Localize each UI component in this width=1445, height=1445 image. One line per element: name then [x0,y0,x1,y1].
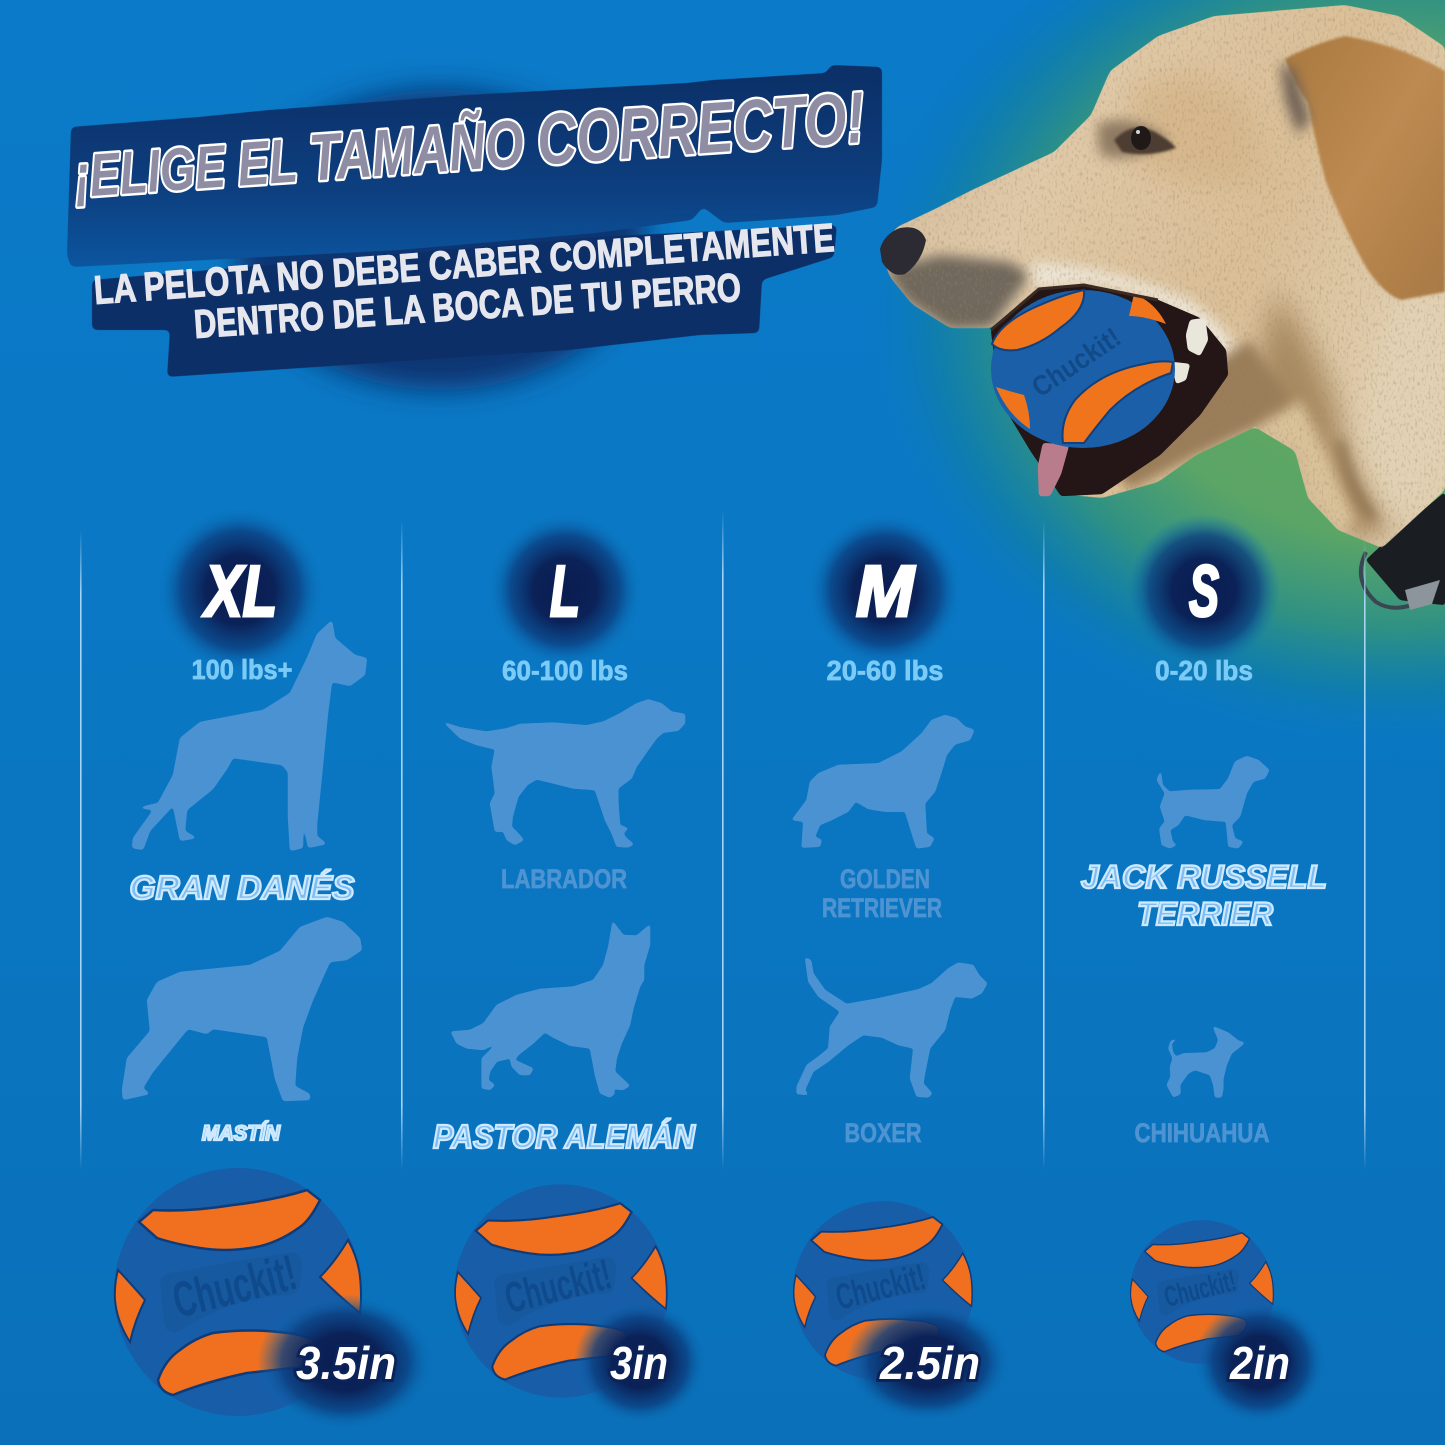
ball logo: Chuckit! [1026,321,1126,403]
size badge M [809,514,961,666]
banner lower shape [92,225,837,377]
silhouette: mastín [122,917,362,1101]
dog photo illustration [880,0,1445,610]
ball in mouth [991,290,1175,448]
ball M: Chuckit! [832,1256,929,1318]
dimension: 2.5in: 2.5in [879,1337,980,1389]
upper lip [991,285,1158,330]
dimension: 3.5in: 3.5in [296,1337,396,1389]
ear [1285,36,1445,300]
silhouette: jack russell terrier [1157,756,1269,848]
ball L [454,1184,668,1398]
size badge S: S [1189,552,1219,632]
tongue [1038,443,1069,496]
silhouette: chihuahua [1167,1026,1245,1097]
nose [880,227,926,275]
size badge L [489,514,641,666]
silhouette: boxer [797,957,987,1097]
weight XL: 100 lbs+ [192,654,292,685]
dimension: 3in [574,1300,706,1424]
silhouette: pastor alemán [451,921,650,1098]
size badge XL [158,508,322,672]
breed: jack russell terrier [1081,859,1327,932]
banner upper shape [67,65,882,267]
ball M [793,1201,973,1381]
size badge XL: XL [202,552,277,632]
teeth [1172,318,1208,384]
dimension: 3in: 3in [610,1337,668,1389]
size badge M: M [856,552,916,632]
breed: pastor alemán: PASTOR ALEMÁN [433,1118,696,1155]
weight S: 0-20 lbs [1155,655,1253,686]
collar [1361,492,1445,610]
breed: boxer: BOXER [844,1118,922,1148]
dimension: 2.5in [846,1302,1010,1422]
mouth [991,285,1228,496]
ear fold shadow [1280,62,1310,135]
head and neck [880,5,1445,548]
column: XL [122,508,367,1145]
breed: jack russell terrier: JACK RUSSELL [1081,859,1327,895]
size badge L: L [550,552,580,632]
breed: chihuahua: CHIHUAHUA [1134,1118,1270,1148]
column: M [792,514,987,1148]
dimension: 2in [1194,1300,1326,1424]
title banner [67,65,882,390]
breed: gran danés: GRAN DANÉS [130,869,354,906]
green photo backdrop [760,0,1445,800]
breed: golden retriever [822,864,942,923]
silhouette: labrador [443,699,685,847]
breed: labrador: LABRADOR [501,864,627,894]
banner glow [235,90,645,390]
fur shading [880,0,1445,550]
weight L: 60-100 lbs [502,655,628,686]
ball XL: Chuckit! [167,1244,302,1329]
column: S [1081,514,1327,1148]
dimension: 2in: 2in [1229,1337,1290,1389]
ball S [1130,1220,1274,1364]
column dividers [80,510,1366,1170]
ball S: Chuckit! [1161,1265,1239,1314]
breed: mastín: MASTÍN [202,1122,281,1145]
title: ¡ELIGE EL TAMAÑO CORRECTO! [72,78,867,213]
size badge S [1128,514,1280,666]
ball XL [114,1168,362,1416]
subtitle [92,216,836,347]
eye [1114,126,1176,154]
column: L [433,514,696,1155]
weight M: 20-60 lbs [826,655,944,686]
breed: jack russell terrier: TERRIER [1137,896,1273,932]
silhouette: gran danés [132,620,367,851]
silhouette: golden retriever [792,715,974,848]
dimension: 3.5in [257,1294,433,1430]
breed: golden retriever: GOLDEN [840,864,930,894]
breed: golden retriever: RETRIEVER [822,893,942,923]
subtitle line 1: LA PELOTA NO DEBE CABER COMPLETAMENTE [92,216,836,313]
subtitle line 2: DENTRO DE LA BOCA DE TU PERRO [193,266,742,347]
ball L: Chuckit! [500,1250,616,1323]
